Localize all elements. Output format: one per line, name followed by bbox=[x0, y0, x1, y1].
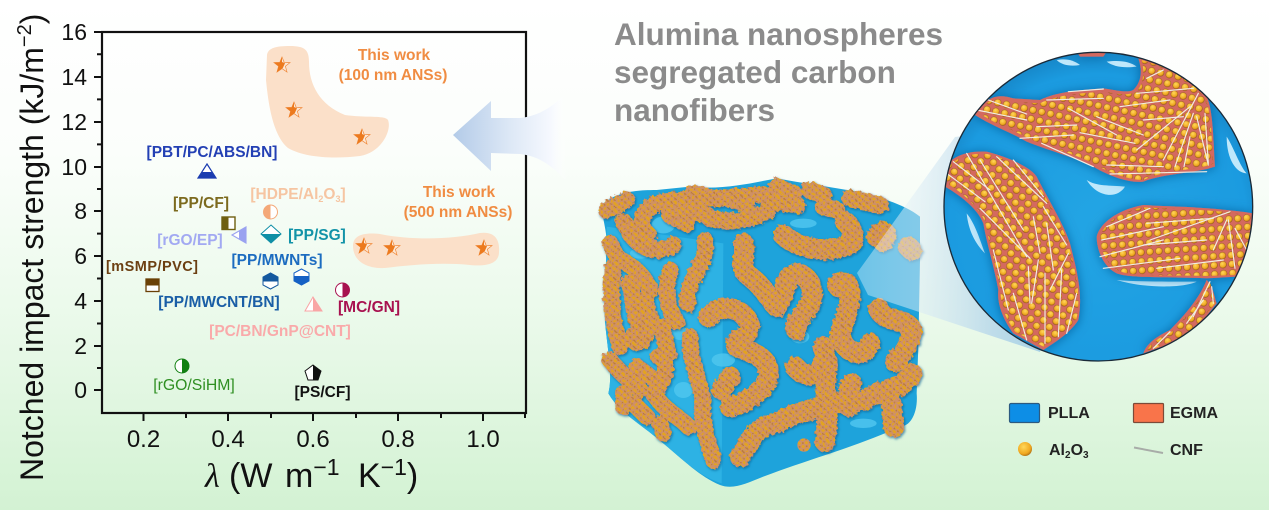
marker and label: PBT/PC/ABS/BN: [PBT/PC/ABS/BN] bbox=[147, 144, 277, 161]
marker and label: PS/CF: [PS/CF] bbox=[295, 384, 350, 401]
y axis title: ) bbox=[14, 14, 50, 24]
marker and label: mSMP/PVC: [mSMP/PVC] bbox=[106, 259, 198, 275]
EGMA / Al2O3 domains bbox=[607, 187, 912, 460]
stars: this work 500 nm bbox=[356, 238, 492, 255]
x tick labels: 0.8 bbox=[381, 426, 415, 453]
chart: notched impact strength vs thermal conductivity bbox=[14, 14, 526, 495]
x tick labels: 0.6 bbox=[296, 426, 330, 453]
y tick labels: 14 bbox=[61, 64, 87, 90]
title: segregated carbon bbox=[614, 54, 896, 90]
marker and label: PS/CF bbox=[295, 365, 350, 401]
marker and label: rGO/SiHM bbox=[153, 359, 235, 394]
circle base: PLLA bbox=[944, 52, 1253, 361]
x axis title: m bbox=[285, 457, 313, 495]
cube illustration bbox=[602, 178, 920, 487]
surface highlights bbox=[630, 217, 877, 428]
x axis title: −1 bbox=[313, 454, 340, 480]
title: Alumina nanospheres bbox=[614, 16, 943, 52]
marker and label: PP/CF: [PP/CF] bbox=[173, 195, 229, 212]
legend: PLLA: PLLA bbox=[1048, 405, 1090, 422]
x axis title: K bbox=[358, 457, 381, 495]
Al2O3 particles bbox=[947, 60, 1252, 352]
legend: Al2O3 bbox=[1018, 442, 1089, 461]
legend: Al2O3: 3 bbox=[1083, 450, 1089, 461]
stars: this work 100 nm bbox=[274, 57, 370, 144]
x tick labels bbox=[127, 426, 500, 453]
legend: EGMA bbox=[1134, 404, 1218, 422]
y axis title: Notched impact strength (kJ/m bbox=[14, 47, 50, 481]
circle outline bbox=[944, 52, 1253, 361]
marker and label: HDPE/Al2O3: 2 bbox=[318, 194, 323, 204]
marker and label: rGO/EP bbox=[157, 227, 246, 249]
domain dot bbox=[797, 438, 811, 452]
marker and label: PP/MWCNT/BN: [PP/MWCNT/BN] bbox=[158, 294, 280, 311]
legend: PLLA bbox=[1010, 404, 1090, 422]
y tick labels: 2 bbox=[74, 333, 87, 359]
y tick labels: 6 bbox=[74, 243, 87, 269]
marker and label: HDPE/Al2O3: O bbox=[323, 186, 335, 203]
marker and label: rGO/SiHM: [rGO/SiHM] bbox=[153, 377, 235, 394]
title: nanofibers bbox=[614, 92, 775, 128]
x axis title: ) bbox=[407, 457, 418, 495]
EGMA domains bbox=[945, 52, 1253, 353]
legend: CNF: CNF bbox=[1170, 442, 1203, 459]
domains: right face bbox=[708, 222, 912, 457]
marker and label: HDPE/Al2O3: [HDPE/Al bbox=[250, 186, 318, 203]
highlight region: 100 nm ANSs bbox=[266, 46, 389, 157]
x tick labels: 0.2 bbox=[127, 426, 160, 453]
marker and label: PP/MWNTs: [PP/MWNTs] bbox=[232, 252, 322, 269]
PLLA highlights bbox=[967, 59, 1247, 286]
legend: Al2O3: O bbox=[1071, 442, 1083, 459]
marker and label: HDPE/Al2O3: 3 bbox=[335, 194, 340, 204]
lighter left face bbox=[605, 227, 723, 483]
y tick labels bbox=[61, 19, 87, 403]
marker and label: PP/CF bbox=[173, 195, 235, 230]
arrow pointing to this work bbox=[453, 92, 567, 182]
y axis ticks bbox=[94, 32, 102, 390]
marker and label: MC/GN bbox=[336, 283, 400, 316]
x axis title: λ bbox=[204, 458, 220, 495]
marker and label: HDPE/Al2O3 bbox=[250, 186, 346, 219]
y axis title: −2 bbox=[14, 24, 36, 47]
marker and label: rGO/EP: [rGO/EP] bbox=[157, 232, 223, 249]
marker and label: PC/BN/GnP@CNT bbox=[209, 297, 351, 340]
zoom cone from cube to circle bbox=[857, 120, 1080, 352]
x axis title: −1 bbox=[381, 454, 407, 480]
marker and label: mSMP/PVC bbox=[106, 259, 198, 292]
y tick labels: 8 bbox=[74, 198, 87, 224]
highlight region: 500 nm ANSs bbox=[353, 233, 499, 268]
y tick labels: 10 bbox=[61, 154, 87, 180]
marker and label: HDPE/Al2O3: ] bbox=[340, 186, 346, 203]
y tick labels: 4 bbox=[74, 288, 87, 314]
legend bbox=[1010, 404, 1218, 461]
legend: EGMA: EGMA bbox=[1170, 405, 1218, 422]
x axis ticks bbox=[144, 413, 525, 421]
marker and label: PP/SG: [PP/SG] bbox=[288, 227, 346, 244]
x tick labels: 1.0 bbox=[466, 426, 500, 453]
domains: top face bbox=[607, 187, 880, 249]
y tick labels: 16 bbox=[61, 19, 87, 45]
legend: Al2O3: Al bbox=[1049, 442, 1065, 459]
label: this work 100 nm: (100 nm ANSs) bbox=[339, 67, 447, 84]
magnified circle bbox=[944, 52, 1253, 361]
marker and label: MC/GN: [MC/GN] bbox=[338, 299, 400, 316]
x tick labels: 0.4 bbox=[211, 426, 245, 453]
marker and label: PP/MWCNT/BN bbox=[158, 273, 280, 311]
x axis title: (W bbox=[229, 457, 272, 495]
marker and label: PBT/PC/ABS/BN bbox=[147, 144, 277, 178]
cube body bbox=[602, 178, 920, 487]
legend: Al2O3: 2 bbox=[1065, 450, 1071, 461]
y tick labels: 0 bbox=[74, 377, 87, 403]
y tick labels: 12 bbox=[61, 109, 87, 135]
marker and label: PP/SG bbox=[261, 225, 346, 244]
label: this work 500 nm: This work bbox=[423, 184, 496, 201]
plot frame bbox=[102, 32, 526, 413]
label: this work 100 nm: This work bbox=[358, 47, 431, 64]
label: this work 500 nm: (500 nm ANSs) bbox=[404, 204, 512, 221]
CNF fibres bbox=[947, 70, 1247, 348]
marker and label: PP/MWNTs bbox=[232, 252, 322, 285]
domains: left face bbox=[610, 240, 713, 460]
marker and label: PC/BN/GnP@CNT: [PC/BN/GnP@CNT] bbox=[209, 323, 351, 340]
legend: CNF bbox=[1134, 442, 1203, 459]
